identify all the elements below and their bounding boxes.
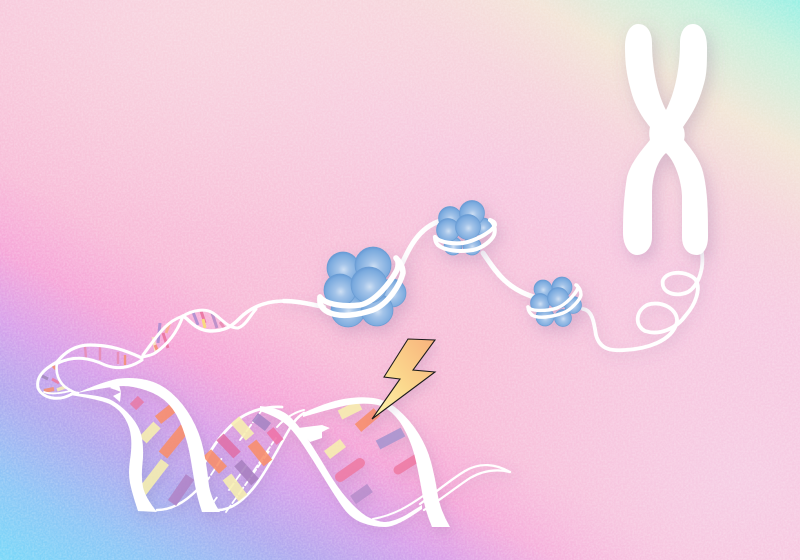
small DNA helix <box>38 301 285 398</box>
linker DNA and chromatin coil <box>284 221 702 350</box>
histone spheres, large <box>324 247 406 327</box>
ribbon strands, large helix <box>70 378 450 527</box>
chromosome <box>623 24 708 255</box>
base pairs, small helix <box>42 311 225 391</box>
large DNA helix <box>70 378 510 527</box>
nucleosome: large <box>320 247 406 327</box>
DNA wrap, medium <box>435 220 495 251</box>
histone spheres, medium <box>436 200 492 255</box>
DNA wrap, small <box>528 285 581 317</box>
DNA wrap, large <box>320 258 403 315</box>
icon: lightning bolt <box>372 339 435 419</box>
thin back strands, large helix <box>157 407 510 519</box>
nucleosome: small <box>528 277 582 326</box>
nucleosome: medium <box>435 200 495 255</box>
strands, small helix <box>38 301 285 398</box>
histone spheres, small <box>530 277 582 326</box>
base pairs, large helix <box>133 399 417 503</box>
